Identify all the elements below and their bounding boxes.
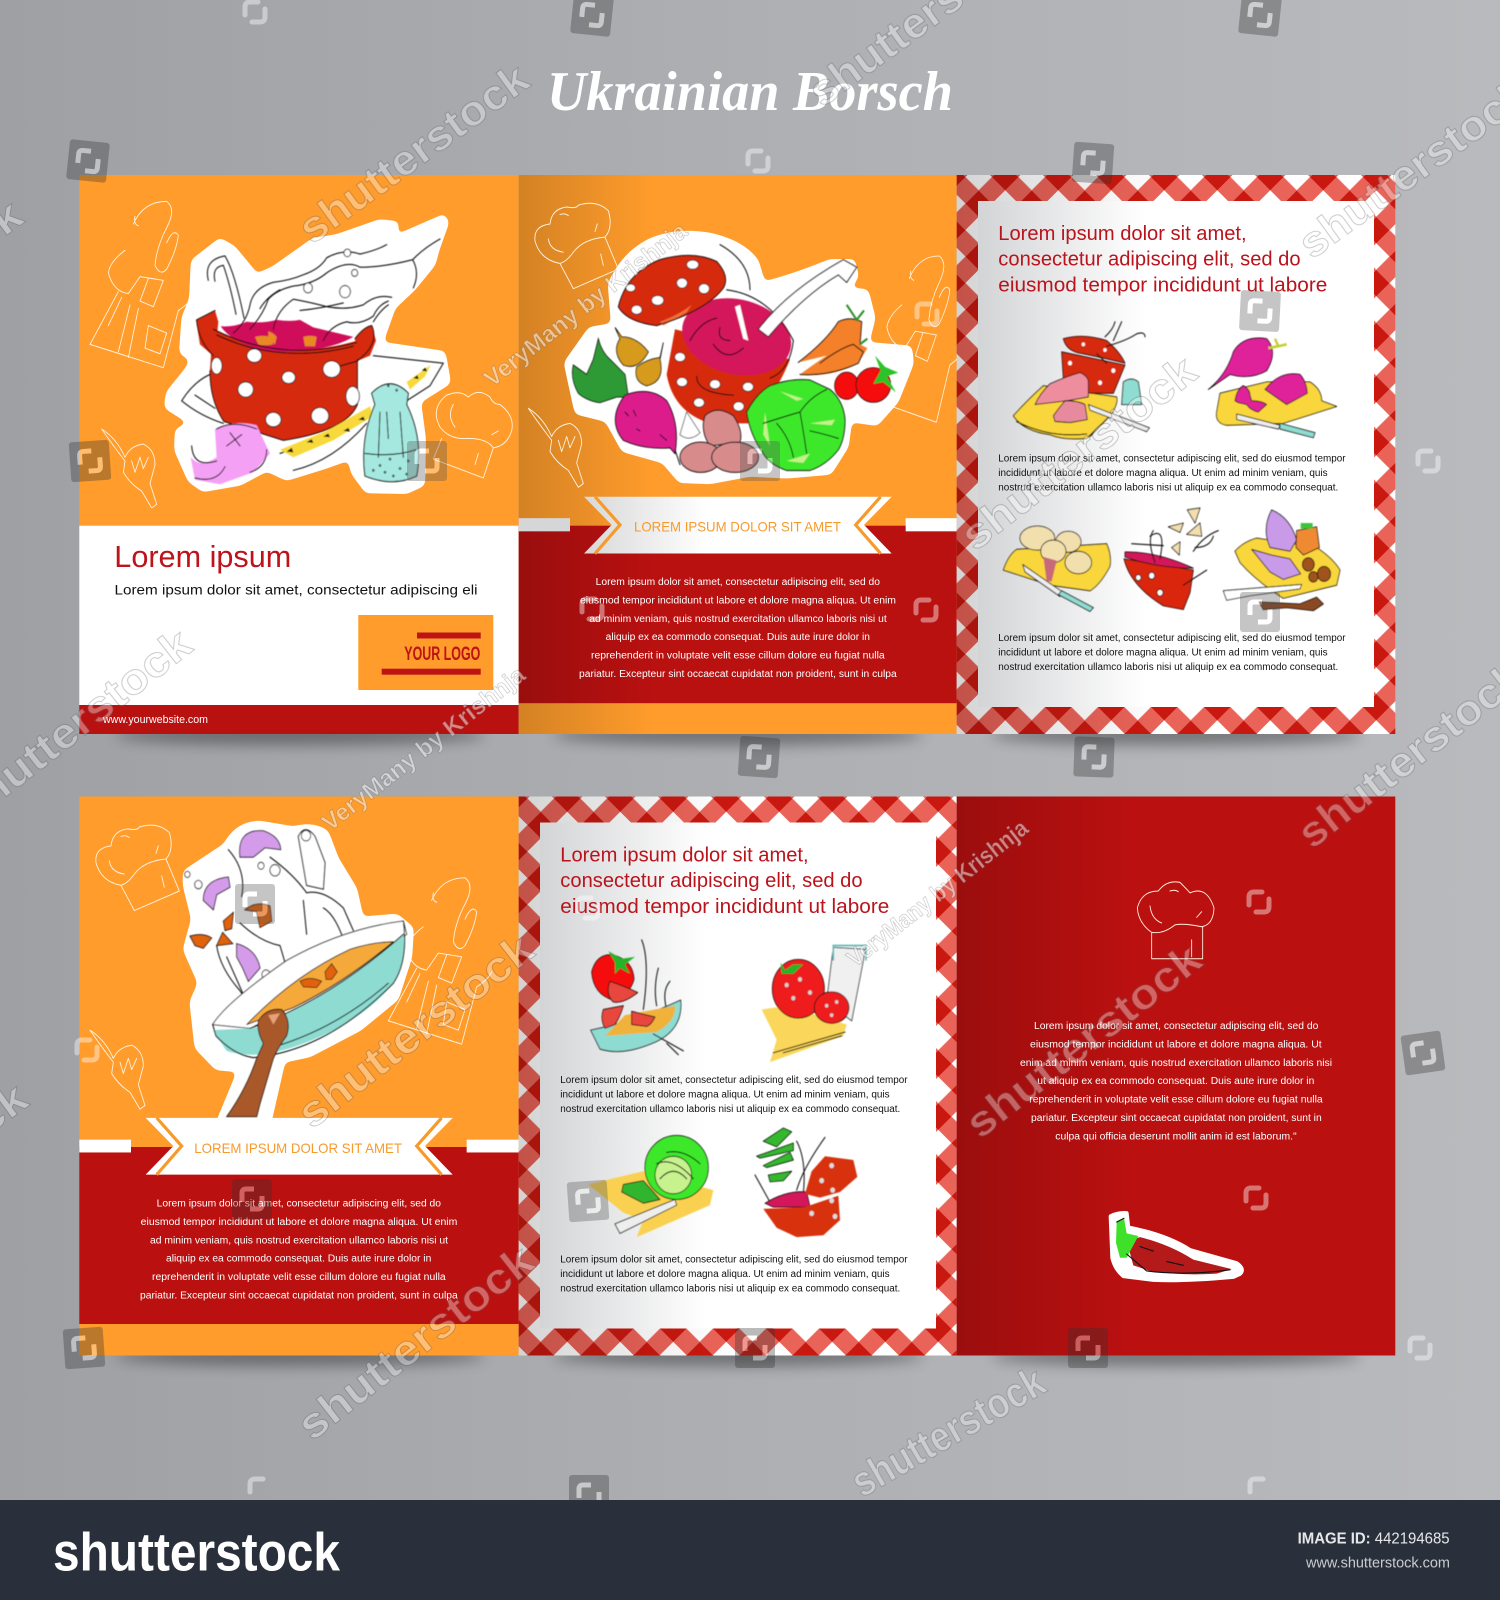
- step text 1: incididunt ut labore et dolore magna aliqua. Ut enim ad minim veniam, quis: [998, 468, 1328, 479]
- pot: [667, 329, 790, 423]
- step text 2: Lorem ipsum dolor sit amet, consectetur adipiscing elit, sed do eiusmod tempor: [998, 633, 1346, 644]
- icon: hand: [528, 408, 583, 487]
- image id: IMAGE ID: 442194685: [1298, 1530, 1450, 1547]
- panel: ingredients: [519, 175, 963, 734]
- body text: culpa qui officia deserunt mollit anim id est laborum.": [1055, 1131, 1297, 1142]
- ribbon tabs: [519, 518, 570, 531]
- illustration: tomatoes and grater: [762, 946, 866, 1062]
- step text 1: Lorem ipsum dolor sit amet, consectetur adipiscing elit, sed do eiusmod tempor: [998, 454, 1346, 465]
- spatula: [298, 830, 325, 889]
- illustration: cabbage and board: [588, 1136, 713, 1237]
- step text 1: nostrud exercitation ullamco laboris nisi ut aliquip ex ea commodo consequat.: [560, 1104, 900, 1115]
- body text: [140, 1198, 458, 1302]
- watermark overlay: VeryMany by Krishnja: [842, 814, 1034, 973]
- body text: reprehenderit in voluptate velit esse cillum dolore eu fugiat nulla: [591, 651, 885, 662]
- sticker outline: [566, 233, 912, 482]
- illustration: tomato and pan: [591, 940, 683, 1055]
- watermark overlay: shutterstock: [289, 1237, 543, 1450]
- body text: ad minim veniam, quis nostrud exercitation ullamco laboris nisi ut: [150, 1235, 448, 1246]
- body text: pariatur. Excepteur sint occaecat cupidatat non proident, sunt in culpa: [579, 669, 897, 680]
- step text 2: nostrud exercitation ullamco laboris nisi ut aliquip ex ea commodo consequat.: [998, 662, 1338, 673]
- heading: Lorem ipsum: [114, 539, 291, 574]
- ribbon: [584, 497, 892, 554]
- steam bubbles: [304, 249, 358, 298]
- pot body: [210, 329, 357, 440]
- body text: ad minim veniam, quis nostrud exercitation ullamco laboris nisi ut: [589, 614, 887, 625]
- polka dots: [626, 260, 753, 411]
- watermark overlay: VeryMany by Krishnja: [479, 217, 693, 393]
- illustration: pot with steam: [1124, 508, 1218, 610]
- body text: eiusmod tempor incididunt ut labore et dolore magna aliqua. Ut: [1030, 1039, 1322, 1050]
- sticker outline: [185, 823, 412, 1126]
- tomato slices: [190, 904, 272, 948]
- step illustrations: [588, 940, 866, 1237]
- step text 2: [560, 1255, 908, 1295]
- polka dots: [211, 349, 359, 427]
- step text 1: Lorem ipsum dolor sit amet, consectetur adipiscing elit, sed do eiusmod tempor: [560, 1075, 908, 1086]
- step text 1: incididunt ut labore et dolore magna aliqua. Ut enim ad minim veniam, quis: [560, 1090, 890, 1101]
- step illustrations: [1003, 322, 1340, 611]
- carrots: [798, 319, 867, 375]
- leaf: [572, 339, 628, 403]
- pot handles: [196, 310, 376, 361]
- icon: apron: [870, 256, 963, 422]
- illustration: onion and carrot: [1223, 510, 1340, 611]
- logo box: YOUR LOGO: [404, 644, 480, 665]
- watermark overlay: shutterstock: [843, 1358, 1053, 1507]
- soup: [221, 320, 353, 352]
- step text 1: nostrud exercitation ullamco laboris nisi ut aliquip ex ea commodo consequat.: [998, 483, 1338, 494]
- website footer bar: [79, 705, 519, 734]
- body text: enim ad minim veniam, quis nostrud exercitation ullamco laboris nisi: [1020, 1058, 1332, 1069]
- step text 2: incididunt ut labore et dolore magna aliqua. Ut enim ad minim veniam, quis: [560, 1269, 890, 1280]
- body text: [579, 577, 897, 680]
- heading: consectetur adipiscing elit, sed do: [998, 248, 1301, 271]
- hat and chilli illustrations: [1111, 882, 1242, 1280]
- ladle: [758, 260, 857, 337]
- step text 2: incididunt ut labore et dolore magna aliqua. Ut enim ad minim veniam, quis: [998, 648, 1328, 659]
- step text 1: [998, 454, 1346, 494]
- watermark overlay: shutterstock: [289, 925, 543, 1138]
- tomatoes: [835, 368, 891, 402]
- body text: reprehenderit in voluptate velit esse cillum dolore eu fugiat nulla: [152, 1272, 446, 1283]
- heading: eiusmod tempor incididunt ut labore: [998, 274, 1327, 297]
- heading: consectetur adipiscing elit, sed do: [560, 869, 863, 892]
- step text 1: [560, 1075, 908, 1115]
- pan group: [185, 830, 407, 1117]
- step text 2: nostrud exercitation ullamco laboris nisi ut aliquip ex ea commodo consequat.: [560, 1284, 900, 1295]
- body text: pariatur. Excepteur sint occaecat cupidatat non proident, sunt in: [1031, 1113, 1322, 1124]
- icon: apron: [90, 201, 193, 368]
- body text: eiusmod tempor incididunt ut labore et dolore magna aliqua. Ut enim: [141, 1217, 457, 1228]
- body text: Lorem ipsum dolor sit amet, consectetur adipiscing elit, sed do: [596, 577, 880, 588]
- illustration: potatoes and board: [1003, 526, 1110, 611]
- website footer bar: www.yourwebsite.com: [102, 714, 208, 726]
- icon: chilli pepper: [1111, 1213, 1242, 1280]
- step text 2: [998, 633, 1346, 673]
- soup: [247, 942, 393, 1025]
- heading: Lorem ipsum dolor sit amet,: [560, 843, 809, 866]
- wooden spoon: [227, 1009, 288, 1117]
- watermark overlay: shutterstock: [290, 54, 538, 253]
- panel: brochure cover: [79, 175, 519, 734]
- title: Ukrainian Borsch: [547, 61, 953, 123]
- step text 2: Lorem ipsum dolor sit amet, consectetur adipiscing elit, sed do eiusmod tempor: [560, 1255, 908, 1266]
- icon: hand: [102, 429, 157, 508]
- body text: eiusmod tempor incididunt ut labore et dolore magna aliqua. Ut enim: [580, 595, 896, 606]
- ribbon: [146, 1118, 453, 1175]
- watermark overlay: VeryMany by Krishnja: [317, 661, 531, 837]
- steam: [233, 239, 440, 341]
- illustration: beet and board: [1208, 338, 1337, 438]
- onion slices: [203, 831, 281, 981]
- illustration: meat and pot: [1013, 322, 1149, 439]
- heading: Lorem ipsum dolor sit amet,: [998, 222, 1247, 245]
- heading: [998, 222, 1327, 297]
- body text: Lorem ipsum dolor sit amet, consectetur adipiscing elit, sed do: [157, 1198, 441, 1210]
- watermark overlay: shutterstock: [957, 935, 1211, 1148]
- ingredients illustration and ribbon: [519, 203, 963, 554]
- panel: recipe steps bottom: [519, 796, 957, 1356]
- body text: ut aliquip ex ea commodo consequat. Duis aute irure dolor in: [1037, 1076, 1314, 1087]
- body text: aliquip ex ea commodo consequat. Duis aute irure dolor in: [606, 632, 870, 643]
- panel: frying pan: [79, 796, 519, 1356]
- body text: [1020, 1021, 1332, 1142]
- heading: eiusmod tempor incididunt ut labore: [560, 895, 889, 918]
- body text: reprehenderit in voluptate velit esse cillum dolore eu fugiat nulla: [1029, 1095, 1323, 1106]
- subheading: Lorem ipsum dolor sit amet, consectetur adipiscing eli: [114, 582, 477, 598]
- body text: pariatur. Excepteur sint occaecat cupidatat non proident, sunt in culpa: [140, 1290, 458, 1302]
- cloth: [182, 356, 443, 470]
- potatoes: [680, 410, 758, 472]
- heading: [560, 843, 889, 918]
- ribbon label: LOREM IPSUM DOLOR SIT AMET: [634, 518, 841, 534]
- icon: chef hat: [96, 825, 179, 911]
- logo box: [358, 615, 493, 690]
- ingredients group: [572, 245, 898, 472]
- pot ink: [197, 310, 374, 440]
- footer logo: shutterstock: [53, 1522, 341, 1582]
- salt shaker: [364, 384, 419, 482]
- pan lid and rim: [213, 921, 407, 1028]
- cover illustration: pot of borsch: [90, 201, 512, 508]
- body text: Lorem ipsum dolor sit amet, consectetur adipiscing elit, sed do: [1034, 1021, 1319, 1032]
- lid: [618, 255, 726, 326]
- panel: recipe steps top: [957, 175, 1395, 734]
- icon: chef hat: [1137, 882, 1214, 959]
- garlic: [191, 423, 270, 484]
- icon: apron: [388, 878, 492, 1044]
- ribbon label: LOREM IPSUM DOLOR SIT AMET: [194, 1140, 402, 1156]
- steam: [217, 850, 353, 1004]
- onions: [615, 327, 663, 386]
- icon: hand: [90, 1030, 145, 1109]
- body text: aliquip ex ea commodo consequat. Duis aute irure dolor in: [166, 1254, 431, 1265]
- ribbon tabs: [79, 1140, 131, 1152]
- panel: back cover: [957, 796, 1395, 1356]
- ladle: [207, 256, 244, 318]
- cabbage: [747, 380, 845, 470]
- illustration: pot and greens: [755, 1128, 857, 1237]
- sticker outline: [167, 217, 448, 491]
- footer bar: [0, 1500, 1500, 1600]
- icon: chef hat: [433, 392, 512, 478]
- beet: [615, 392, 676, 453]
- footer url: www.shutterstock.com: [1305, 1556, 1450, 1572]
- icon: chef hat: [535, 203, 618, 289]
- pan illustration and ribbon: [79, 823, 519, 1175]
- panel shadows: [115, 725, 1361, 1366]
- watermark overlay: shutterstock: [952, 347, 1206, 560]
- pot details group: [182, 239, 443, 484]
- pan body: [213, 934, 404, 1055]
